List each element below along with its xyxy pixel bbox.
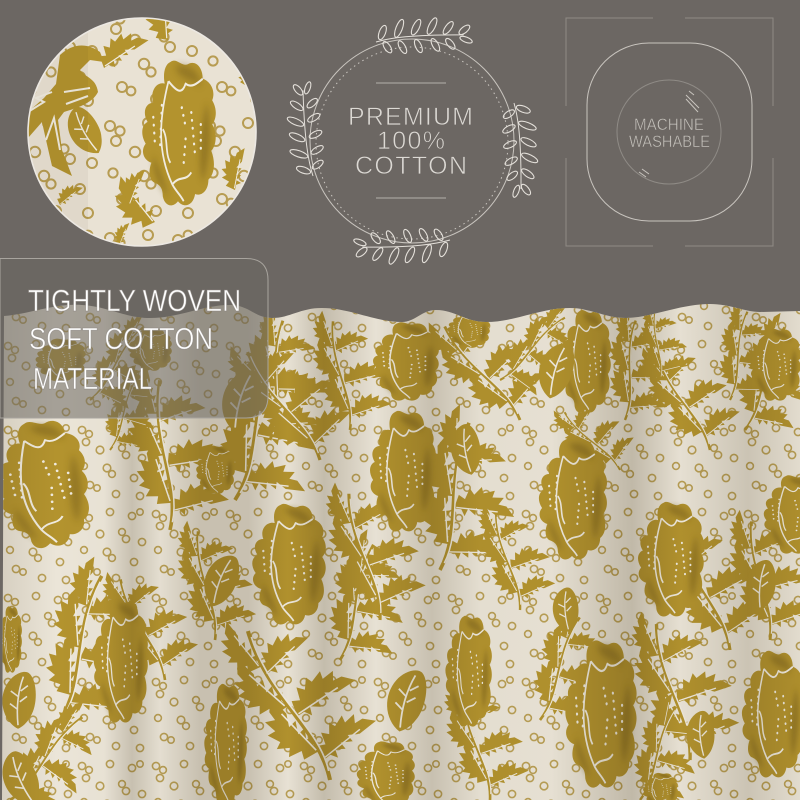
icon: bottom laurel sprig <box>352 225 452 269</box>
text: machine washable: MACHINE <box>634 116 704 134</box>
icon: top laurel sprig <box>374 13 474 57</box>
panel: curtain fabric photo <box>0 285 800 800</box>
icon: right laurel sprig <box>500 101 542 199</box>
callout text: TIGHTLY WOVEN <box>28 283 241 318</box>
badge: premium 100% cotton wreath <box>282 13 542 269</box>
text: premium 100% cotton: PREMIUM <box>348 103 473 131</box>
icon: left laurel sprig <box>282 80 327 178</box>
curtain large flowers <box>0 310 800 800</box>
callout text <box>28 283 241 396</box>
curtain pleat shading <box>0 300 800 800</box>
panel: fabric close-up circle <box>28 0 258 248</box>
text: machine washable: WASHABLE <box>629 133 710 151</box>
text: machine washable <box>629 116 710 151</box>
text: premium 100% cotton <box>348 103 473 180</box>
callout text: MATERIAL <box>33 361 152 396</box>
curtain gold leaf sprays <box>0 285 800 800</box>
callout text: SOFT COTTON <box>29 321 213 356</box>
callout: tightly woven soft cotton material <box>0 258 268 418</box>
curtain leaves <box>0 340 776 800</box>
text: premium 100% cotton: COTTON <box>355 152 467 180</box>
text: premium 100% cotton: 100% <box>377 127 445 155</box>
badge: machine washable <box>566 18 773 246</box>
